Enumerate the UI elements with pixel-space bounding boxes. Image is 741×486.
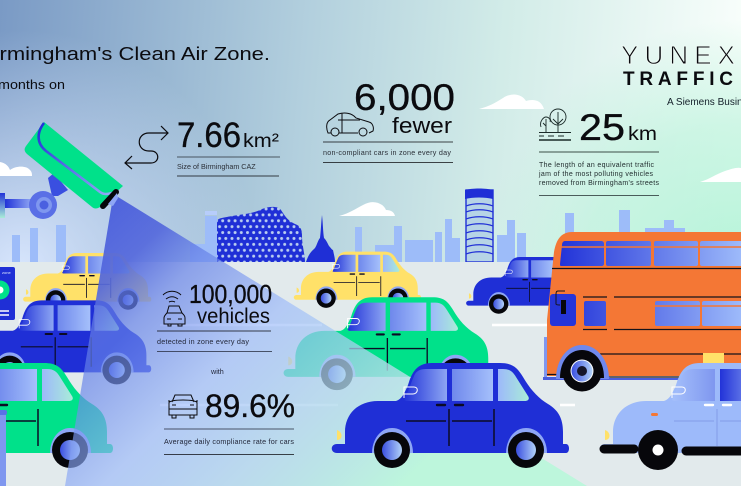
stat: compliance rate: 89.6%: [205, 388, 295, 424]
stat: traffic jam length: 25: [579, 107, 625, 148]
stat: fewer cars: fewer: [392, 113, 452, 138]
stat: compliance rate: [164, 388, 295, 454]
zone sign: [0, 267, 15, 320]
car: blue behind bus: [466, 257, 594, 314]
stat: zone size: [125, 116, 280, 176]
stat: fewer cars: [323, 77, 455, 162]
car: blue left: [0, 300, 151, 384]
car: yellow left: [23, 253, 151, 310]
office tower: [465, 188, 493, 262]
stat: vehicles detected: detected in zone every day: [157, 337, 249, 346]
icon: car front: [168, 395, 198, 418]
bollard: [0, 410, 7, 486]
skyline: [12, 210, 685, 262]
camera light beam: [65, 197, 587, 486]
cloud: left: [0, 162, 32, 176]
cloud: right: [700, 168, 741, 182]
stat: vehicles detected: vehicles: [197, 305, 270, 328]
road markings: [160, 325, 575, 405]
taxi: [600, 353, 741, 470]
stat: traffic jam length: km: [628, 124, 657, 145]
icon: trees and road: [539, 109, 571, 140]
icon: car outline: [327, 113, 373, 136]
cloud: lower middle: [339, 202, 395, 216]
stat: vehicles detected: 100,000: [189, 279, 272, 309]
stat: vehicles detected: [157, 279, 272, 352]
stat: fewer cars: non-compliant cars in zone every day: [323, 148, 451, 157]
car: green left: [0, 363, 113, 468]
road: [0, 262, 741, 486]
car: yellow middle: [294, 252, 421, 308]
stat: traffic jam length: removed from Birmingham's streets: [539, 180, 660, 187]
double decker bus: [543, 232, 741, 392]
stat: traffic jam length: The length of an equivalent traffic: [539, 162, 654, 169]
connecting word: with: with: [210, 367, 224, 376]
icon: car with signal: [163, 291, 185, 326]
stat: compliance rate: Average daily compliance rate for cars: [164, 437, 294, 446]
stat: traffic jam length: [538, 107, 660, 196]
cloud: upper middle: [479, 94, 544, 109]
spire: [306, 215, 335, 262]
logo: YUNEX: [621, 40, 735, 70]
stat: zone size: 7.66: [177, 116, 241, 155]
car: green middle: [284, 297, 494, 390]
zone sign: zone: [2, 270, 11, 275]
dotted landmark building: [217, 207, 305, 262]
car: blue foreground: [332, 363, 569, 468]
stat: traffic jam length: jam of the most polluting vehicles: [538, 171, 654, 178]
security camera: [0, 122, 123, 219]
stat: zone size: Size of Birmingham CAZ: [177, 162, 256, 171]
logo: TRAFFIC: [623, 69, 733, 90]
stat: fewer cars: 6,000: [354, 77, 455, 118]
icon: winding arrow: [125, 126, 168, 169]
logo: [621, 40, 741, 108]
stat: zone size: km²: [243, 131, 279, 152]
